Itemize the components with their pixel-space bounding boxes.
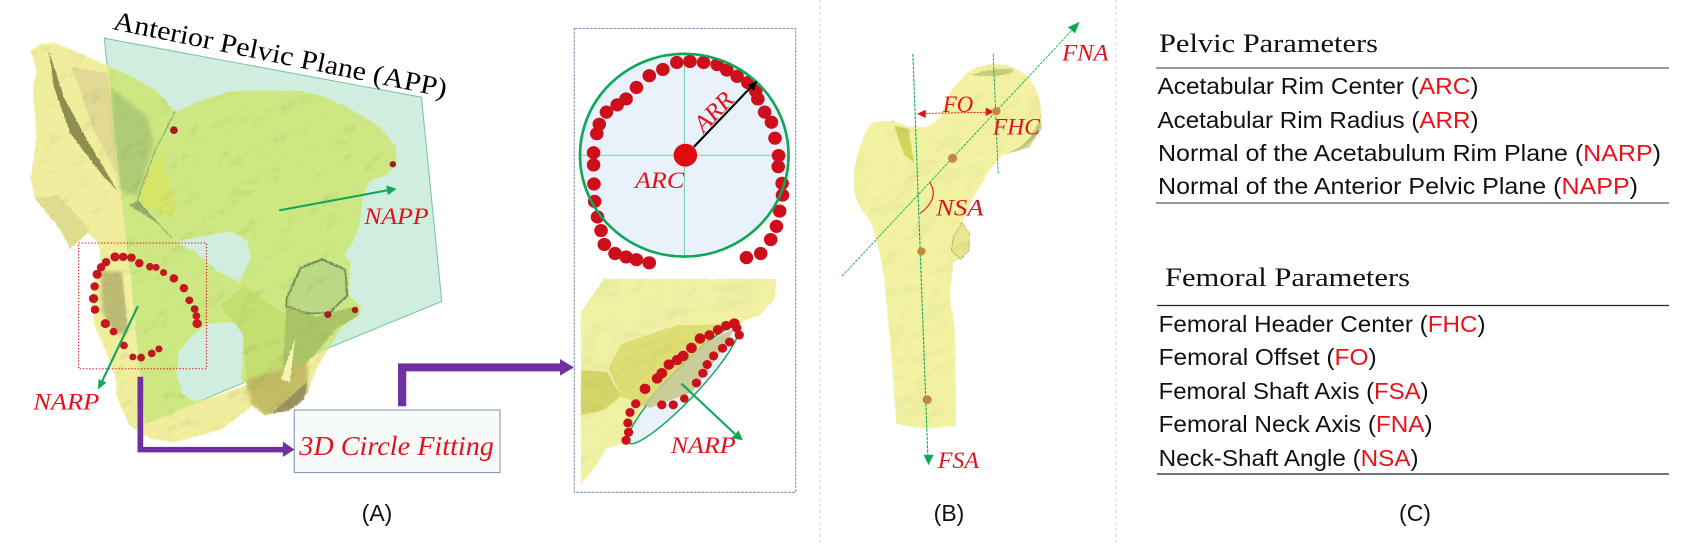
row FSA: Femoral Shaft Axis ( FSA) bbox=[1159, 378, 1429, 404]
caption A: (A) bbox=[362, 500, 392, 526]
label FNA: FNA bbox=[1061, 41, 1109, 67]
acetabular rim points bbox=[89, 252, 202, 361]
label ARC: ARC bbox=[633, 168, 685, 194]
purple arrow to zoom panel bbox=[402, 359, 574, 406]
landmark dots bbox=[917, 107, 1000, 404]
label FSA: FSA bbox=[937, 448, 979, 474]
label FO: FO bbox=[942, 92, 973, 118]
zoom panel: circle fitting detail bbox=[574, 28, 796, 492]
heading: femoral parameters: Femoral Parameters bbox=[1165, 263, 1410, 292]
circle stroke over points bbox=[580, 54, 789, 257]
label FHC: FHC bbox=[992, 115, 1041, 141]
dotted region of interest bbox=[79, 243, 206, 369]
radius arrow ARR bbox=[694, 81, 757, 147]
panel C: parameter tables bbox=[1156, 29, 1669, 526]
arrow: NAPP normal bbox=[279, 185, 396, 210]
panel A: pelvis with anterior pelvic plane bbox=[30, 38, 574, 473]
row ARC: Acetabular Rim Center ( ARC) bbox=[1158, 73, 1478, 99]
neck-shaft angle arc bbox=[920, 182, 933, 214]
label ARR: ARR bbox=[687, 87, 740, 139]
divider bbox=[819, 0, 821, 544]
femoral shaft axis bbox=[913, 54, 934, 465]
close-up rim points bbox=[621, 318, 744, 445]
close-up label NARP: NARP bbox=[670, 433, 736, 459]
plane title: Anterior Pelvic Plane (APP) bbox=[111, 5, 450, 103]
3D circle fitting box: 3D Circle Fitting bbox=[298, 431, 494, 461]
row FHC: Femoral Header Center ( FHC) bbox=[1159, 311, 1486, 337]
label NAPP: NAPP bbox=[363, 204, 429, 230]
row FNA: Femoral Neck Axis ( FNA) bbox=[1159, 411, 1433, 437]
row ARR: Acetabular Rim Radius ( ARR) bbox=[1158, 107, 1479, 133]
row NSA: Neck-Shaft Angle ( NSA) bbox=[1159, 445, 1419, 471]
pelvis bone bbox=[30, 42, 396, 442]
heading: pelvic parameters: Pelvic Parameters bbox=[1159, 29, 1378, 58]
purple arrow to circle fitting bbox=[140, 377, 295, 457]
label NSA: NSA bbox=[935, 196, 984, 221]
row NARP: Normal of the Acetabulum Rim Plane ( NARP) bbox=[1158, 140, 1661, 166]
pelvic landmark points bbox=[170, 126, 396, 318]
close-up NARP arrow bbox=[681, 384, 743, 440]
label NARP: NARP bbox=[32, 390, 99, 416]
femoral neck axis bbox=[842, 22, 1080, 276]
caption C: (C) bbox=[1399, 500, 1431, 526]
femoral offset arrow bbox=[917, 108, 994, 118]
fitted circle bbox=[580, 54, 789, 259]
femur bone bbox=[853, 64, 1041, 429]
row NAPP: Normal of the Anterior Pelvic Plane ( NAPP) bbox=[1158, 173, 1638, 199]
dashed frame bbox=[574, 28, 796, 492]
3D circle fitting box bbox=[294, 410, 500, 473]
acetabulum close-up bbox=[580, 278, 776, 484]
anterior pelvic plane bbox=[104, 38, 442, 424]
panel B: femur bbox=[842, 22, 1109, 474]
divider bbox=[1115, 0, 1117, 544]
head vertical line bbox=[993, 54, 998, 174]
center point ARC bbox=[674, 144, 697, 167]
rim points bbox=[587, 55, 789, 269]
arrow: NARP normal bbox=[98, 306, 138, 390]
caption B: (B) bbox=[934, 500, 964, 526]
row FO: Femoral Offset ( FO) bbox=[1159, 344, 1377, 370]
